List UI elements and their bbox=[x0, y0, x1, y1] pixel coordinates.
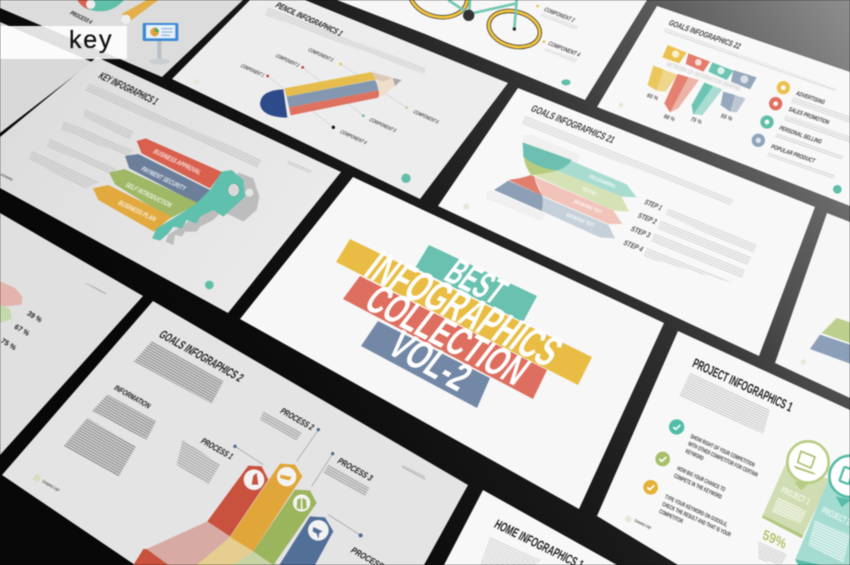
step text blocks bbox=[643, 208, 757, 283]
arrow labels: BROWSING TEST bbox=[572, 199, 603, 216]
percent labels: 75 % bbox=[689, 117, 703, 126]
panel: center cover slide bbox=[240, 177, 664, 509]
arrow labels: TESTING bbox=[580, 187, 598, 197]
step labels bbox=[622, 198, 665, 254]
title: PENCIL INFOGRAPHICS 1 bbox=[273, 1, 345, 37]
percent labels: 39 % bbox=[25, 309, 44, 324]
url label bbox=[402, 465, 425, 480]
percent labels bbox=[0, 309, 44, 352]
company logo label: Company Logo bbox=[634, 518, 652, 530]
process labels: PROCESS 3 bbox=[335, 456, 375, 483]
icons: white process circles bbox=[244, 467, 329, 541]
step labels: STEP 1 bbox=[643, 198, 665, 212]
process descriptions bbox=[177, 411, 369, 496]
page number dot bbox=[205, 281, 214, 289]
checklist text: COMPETE IN THE KEYWORD bbox=[673, 473, 723, 501]
connector lines bbox=[268, 64, 407, 127]
checklist text: KEYWORD bbox=[684, 449, 705, 462]
panel: goals infographics 22 slide bbox=[597, 6, 850, 206]
panel: bicycle slide bbox=[337, 0, 647, 100]
title: best infographics collection vol-2: BEST bbox=[437, 251, 516, 312]
component labels: COMPONENT 2 bbox=[274, 54, 301, 68]
labels: POPULAR PRODUCT bbox=[769, 144, 816, 165]
chart: hourglass arrows bbox=[531, 161, 637, 238]
logo dot bbox=[625, 516, 632, 522]
company logo label: Company Logo bbox=[41, 479, 61, 492]
process labels: PROCESS 1 bbox=[199, 436, 236, 461]
text block bbox=[134, 341, 223, 404]
panel: goals infographics 21 slide bbox=[438, 88, 815, 356]
card: project 1: PROJECT 1 bbox=[780, 485, 811, 507]
heading: information: INFORMATION bbox=[112, 384, 153, 410]
icon: bicycle bbox=[404, 0, 544, 52]
title: GOALS INFOGRAPHICS 21 bbox=[528, 104, 617, 146]
panel: left middle slide bbox=[0, 22, 92, 133]
checklist text: CHECK THE RESULT AND THAT IS YOUR bbox=[661, 502, 732, 539]
title: KEY INFOGRAPHICS 1 bbox=[96, 71, 161, 107]
chart: hourglass body bbox=[494, 142, 572, 211]
logo dot bbox=[619, 103, 623, 107]
panel: project infographics 1 slide bbox=[597, 331, 850, 565]
icon: key shadow bbox=[166, 172, 259, 245]
title: best infographics collection vol-2: COLLECTION bbox=[356, 277, 538, 394]
title: GOALS INFOGRAPHICS 22 bbox=[667, 18, 743, 51]
labels bbox=[769, 90, 831, 165]
page number dot bbox=[833, 185, 842, 194]
icon: key bbox=[152, 170, 253, 241]
checklist text: WITH OTHER COMPETITOR FOR CERTAIN bbox=[687, 441, 758, 479]
arrows: process bars bbox=[133, 464, 333, 565]
connector lines bbox=[235, 430, 361, 535]
banner: key label: key bbox=[69, 26, 113, 54]
text block bbox=[679, 373, 770, 434]
subtitle: NETWORK OF INFORMATION SHARING bbox=[665, 61, 742, 93]
panel: far right slide bbox=[775, 213, 850, 398]
icons: check bullets bbox=[643, 419, 684, 495]
card: project 1 bbox=[762, 441, 830, 538]
component markers bbox=[536, 5, 545, 43]
text block bbox=[480, 536, 542, 565]
panel: home infographics slide bbox=[444, 490, 617, 565]
url text bbox=[84, 283, 107, 294]
step labels: STEP 2 bbox=[636, 211, 659, 226]
connector dots bbox=[233, 428, 363, 537]
bar chart: shield bars bbox=[648, 66, 746, 115]
icon: pencil bbox=[260, 72, 402, 118]
component dots bbox=[266, 63, 408, 129]
logo dot bbox=[33, 474, 41, 482]
panel: pencil infographics slide bbox=[172, 0, 508, 199]
stat description bbox=[758, 542, 787, 565]
page number dot bbox=[401, 174, 411, 183]
checklist text: SHOW RIGHT OF YOUR COMPETITION bbox=[689, 434, 755, 469]
stat: 59 percent: 59% bbox=[761, 526, 788, 552]
percent labels: 67 % bbox=[12, 322, 32, 338]
page number dot bbox=[561, 79, 571, 85]
arrows: key teeth: BUSINESS PLAN bbox=[116, 199, 159, 223]
component labels: COMPONENT 3 bbox=[306, 48, 334, 63]
title: best infographics collection vol-2: INFOGRAPHICS bbox=[356, 242, 573, 375]
title: GOALS INFOGRAPHICS 2 bbox=[156, 328, 246, 384]
text block bbox=[265, 7, 425, 74]
chart: pyramid layers bbox=[810, 318, 850, 364]
logo dot bbox=[801, 359, 806, 365]
text blocks bbox=[540, 13, 578, 63]
colored title bars bbox=[336, 239, 592, 408]
title: best infographics collection vol-2 bbox=[356, 242, 573, 399]
checklist text: TYPE YOUR KEYWORD ON GOOGLE, bbox=[664, 494, 728, 529]
process labels: PROCESS 2 bbox=[278, 406, 316, 432]
label: process 4: PROCESS 4 bbox=[68, 10, 94, 26]
icon: keynote app bbox=[143, 23, 178, 64]
percent labels bbox=[645, 93, 734, 126]
logo dot bbox=[463, 204, 469, 210]
component labels bbox=[239, 48, 440, 146]
card: project 2 bbox=[795, 456, 850, 565]
chart: yellow arrow bbox=[121, 0, 158, 24]
component labels: COMPONENT 5 bbox=[367, 118, 397, 134]
title: best infographics collection vol-2: VOL-2 bbox=[380, 322, 481, 399]
panel: goals infographics 2 slide bbox=[2, 301, 468, 565]
percent labels: 65 % bbox=[645, 93, 660, 102]
step labels: STEP 4 bbox=[622, 239, 646, 254]
label: component 2: COMPONENT 2 bbox=[542, 7, 576, 24]
checklist text: HOW BIG YOUR CHANCE TO bbox=[676, 466, 726, 494]
icons: round bullets bbox=[752, 81, 790, 147]
arrows: key teeth: BUSINESS APPROVAL bbox=[151, 147, 204, 177]
label: component 4: COMPONENT 4 bbox=[546, 41, 582, 58]
panel: left lower slide bbox=[0, 213, 143, 455]
labels: PERSONAL SELLING bbox=[778, 125, 823, 145]
text blocks bbox=[767, 97, 850, 179]
text block bbox=[522, 115, 733, 205]
arrows: key teeth: SELF INTRODUCTION bbox=[123, 181, 174, 209]
text blocks bbox=[63, 395, 156, 477]
banner: key label bbox=[0, 26, 127, 59]
arrow labels: BROWSING TEST bbox=[564, 213, 596, 229]
component labels: COMPONENT 1 bbox=[239, 64, 266, 78]
icon tiles bbox=[662, 45, 757, 89]
step labels: STEP 3 bbox=[629, 225, 653, 239]
process labels bbox=[199, 406, 391, 565]
labels: ADVERTISING bbox=[794, 90, 826, 106]
chart: donut segment bbox=[77, 0, 124, 11]
component labels: COMPONENT 6 bbox=[411, 110, 440, 125]
text block bbox=[663, 28, 837, 92]
text blocks bbox=[29, 83, 312, 188]
labels: SALES PROMOTION bbox=[787, 106, 831, 126]
arrow labels: PROGRAMMING bbox=[587, 174, 617, 190]
arrows: key teeth bbox=[93, 138, 222, 232]
chart: shield fragments bbox=[0, 281, 22, 323]
checklist text: COMPETITOR bbox=[658, 509, 684, 525]
chart: hourglass shadows bbox=[486, 135, 580, 221]
logo dot bbox=[194, 79, 199, 84]
panel: process slide, top left bbox=[0, 0, 243, 77]
panel: key infographics slide bbox=[0, 57, 341, 313]
checklist text bbox=[658, 434, 758, 539]
percent labels: 98 % bbox=[662, 114, 676, 123]
percent labels: 55 % bbox=[719, 114, 734, 123]
arrows: key teeth: PAYMENT SECURITY bbox=[139, 165, 189, 192]
component labels: COMPONENT 4 bbox=[338, 130, 368, 146]
arrow labels bbox=[564, 174, 617, 229]
